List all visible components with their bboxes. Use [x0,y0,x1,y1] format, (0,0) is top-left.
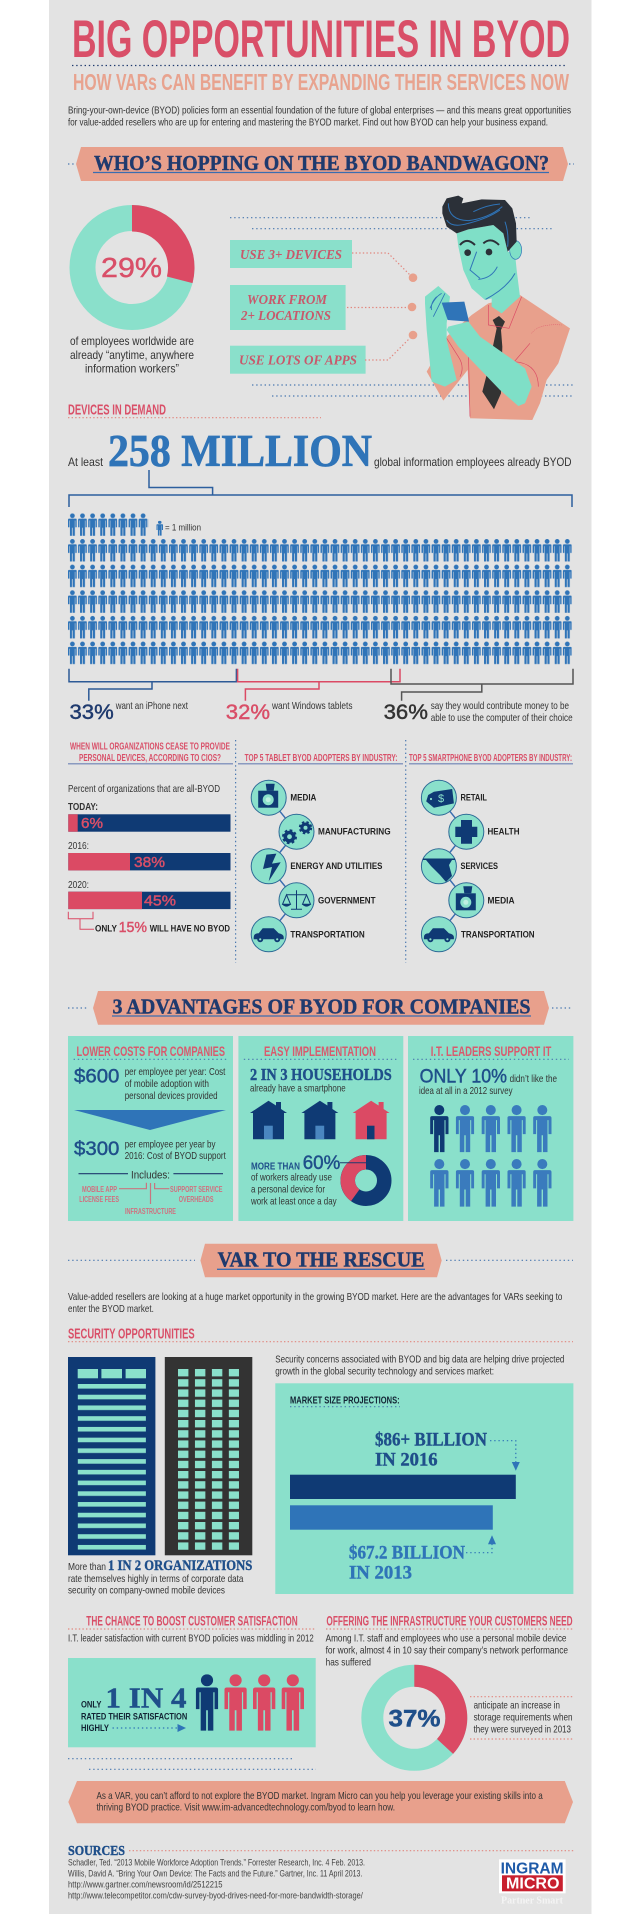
stat: 36% contribute money: 36% [384,701,428,724]
column: top 5 smartphone adopters [409,752,573,952]
icon: camera, media [251,780,317,815]
cost: $600: $600 [74,1067,119,1088]
logo: Ingram Micro Partner Smart [499,1859,566,1907]
bar: today 6%: 6% [81,816,103,832]
donut chart: 60% [340,1155,384,1201]
bar: 2016 38%: 38% [134,855,165,871]
arrow: to 2016 bar [490,1441,520,1471]
label: use 3+ devices [230,240,417,282]
cost: $300: 2016: Cost of BYOD support [125,1150,226,1162]
column heading: WHEN WILL ORGANIZATIONS CEASE TO PROVIDE [70,740,230,752]
icon: price tag, retail [421,780,487,815]
bracket: 33% [69,669,236,701]
icon: bolt, energy and utilities: ENERGY AND UTILITIES [290,861,382,872]
text: more than 60%: MORE THAN [251,1160,300,1172]
text: storage requirements [470,1697,573,1739]
icon: price tag, retail: RETAIL [460,793,487,804]
statistic: only 10%: idea at all in a 2012 survey [419,1085,513,1097]
donut caption: already “anytime, anywhere [70,348,194,362]
donut chart: 37% [372,1665,467,1760]
icon: network bridge, services: SERVICES [460,861,498,872]
heading: security opportunities: SECURITY OPPORTUNITIES [68,1327,195,1343]
text: more than 60% [250,1153,340,1208]
banner: VAR to the rescue: VAR TO THE RESCUE [218,1248,424,1272]
heading: devices in demand: DEVICES IN DEMAND [68,402,166,418]
includes list [78,1169,223,1216]
icon: car, transportation [251,917,365,952]
text: more than 60%: work at least once a day [250,1196,337,1208]
column: when will organizations cease [68,740,233,936]
text: network performance [326,1633,568,1669]
bar: 2020 45%: 2020: [68,880,89,891]
label: use lots of apps [230,331,417,374]
text: 1 in 2 organizations: More than [68,1561,106,1573]
cost: $300 [74,1138,226,1162]
icon: gears, manufacturing [279,814,391,849]
panel: market size projections [275,1383,573,1594]
callout: only 15% will have no BYOD: 15% [119,919,147,936]
text: storage requirements: storage requirements when [474,1712,573,1724]
icon: cross, health: HEALTH [488,827,520,838]
text: 1 in 2 organizations [68,1558,252,1597]
panel: 1 in 4 [68,1658,316,1747]
sources: Willis, David A. “Bring Your Own Device: The Facts and the Future.” Gartner, Inc. 11 April 2013. [68,1869,362,1880]
statistic text: 1 IN 4 [106,1682,186,1714]
bar: 2020 45% [68,880,230,910]
bar: 2016 38% [68,841,230,871]
panel heading: I.T. LEADERS SUPPORT IT [431,1043,552,1059]
cost: $600 [74,1066,225,1102]
panel heading: EASY IMPLEMENTATION [264,1043,376,1059]
text: 1 in 2 organizations: rate themselves highly in terms of corporate data [68,1573,244,1585]
icon: car, transportation: TRANSPORTATION [461,929,535,940]
intro text [68,104,571,128]
donut chart: 29% [82,205,195,317]
pictogram: 4 people [196,1674,304,1731]
column heading: PERSONAL DEVICES, ACCORDING TO CIOS? [79,752,221,764]
text: storage requirements: anticipate an increase in [474,1700,560,1712]
cost: $300: $300 [74,1139,119,1160]
donut caption: information workers” [85,362,179,376]
text: 1 in 2 organizations: security on company-owned mobile devices [68,1585,225,1597]
icon: car, transportation [421,917,535,952]
arrow: down triangle [74,1110,226,1130]
legend: one person equals 1 million [156,521,201,536]
banner: 3 advantages of BYOD: 3 ADVANTAGES OF BYOD FOR COMPANIES [112,994,530,1018]
text: more than 60%: of workers already use [251,1172,332,1184]
donut caption: of employees worldwide are [70,334,194,348]
stat: 33% want an iPhone: want an iPhone next [115,700,188,712]
icon: scales, government [279,883,376,918]
bar: 2016 38%: 2016: [68,841,89,852]
statistic: 2 in 3 households [250,1065,392,1094]
statistic: 2 in 3 households: already have a smartphone [250,1082,346,1094]
legend: one person equals 1 million: = 1 million [165,523,201,534]
includes list: OVERHEADS [179,1195,214,1204]
label: work from 2+ locations [230,285,416,330]
stat: 32% want Windows tablets [226,700,352,724]
donut chart: 29%: 29% [101,252,162,283]
column heading [68,740,233,764]
banner: 3 advantages of BYOD [68,991,573,1025]
sources [68,1844,574,1901]
stat: 36% contribute money: say they would contribute money to be [431,700,569,712]
cost: $600: per employee per year: Cost [125,1066,225,1078]
cost: $600: of mobile adoption with [125,1078,209,1090]
sources: http://www.gartner.com/newsroom/id/2512215 [68,1880,222,1891]
logo: Ingram Micro Partner Smart: INGRAM [501,1860,564,1877]
heading: customer satisfaction: THE CHANCE TO BOOST CUSTOMER SATISFACTION [86,1614,298,1629]
cost: $600: personal devices provided [125,1090,218,1102]
pictogram: 10 people [430,1105,552,1207]
icon: bolt, energy and utilities [251,849,382,884]
bar: 2020 45%: 45% [144,894,176,910]
text: 1 in 2 organizations: 1 IN 2 ORGANIZATIONS [108,1558,252,1574]
text: storage requirements: they were surveyed in 2013 [474,1724,571,1736]
paragraph: VAR opportunity: enter the BYOD market. [68,1303,154,1315]
stat: 36% contribute money: able to use the computer of their choice [431,712,573,724]
label: $67.2 billion: $67.2 BILLION [349,1542,465,1563]
sources: Schadler, Ted. “2013 Mobile Workforce Adoption Trends.” Forrester Research, Inc. 4 Feb. 2013. [68,1858,365,1869]
arrow: to 2013 bar [466,1535,496,1553]
callout: only 15% will have no BYOD [68,912,230,936]
statistic: 258 million: At least [68,455,104,469]
label: use lots of apps: USE LOTS OF APPS [239,354,357,369]
bracket: 32% [238,669,400,701]
bar: today 6%: TODAY: [68,802,98,813]
stat: 32% want Windows tablets: 32% [226,701,270,724]
stat: 32% want Windows tablets: want Windows tablets [271,700,352,712]
icon: three houses [250,1101,390,1139]
stat: 36% contribute money [384,700,573,724]
logo: Ingram Micro Partner Smart: Partner Smart [501,1896,564,1907]
icon: camera, media: MEDIA [290,793,317,804]
statistic: only 10% [419,1066,557,1097]
bracket above crowd [69,470,572,507]
arrow: dotted [112,1724,186,1732]
text: I.T. leader satisfaction: I.T. leader satisfaction with current BYOD policies was middling in 2012 [68,1633,314,1645]
icon: navy server block [68,1357,155,1555]
panel: easy implementation [238,1036,403,1221]
includes list: INFRASTRUCTURE [125,1207,176,1216]
stat: 33% want an iPhone [70,700,188,724]
includes list: Includes: [131,1169,170,1181]
chart subtitle: Percent of organizations that are all-BYOD [68,783,220,795]
statistic: 258 million: global information employees already BYOD [374,455,572,469]
banner: who's hopping on the BYOD bandwagon: WHO’S HOPPING ON THE BYOD BANDWAGON? [94,151,549,175]
text: more than 60%: 60% [303,1153,340,1174]
banner: call to action: thriving BYOD practice. Visit www.im-advancedtechnology.com/byod to learn how. [96,1802,395,1814]
label: $86+ billion: $86+ BILLION [375,1430,487,1450]
icon: network bridge, services [421,849,498,884]
text: network performance: for work, almost 4 in 10 say their company’s network performance [326,1645,568,1657]
statistic text: RATED THEIR SATISFACTION [81,1711,187,1722]
panel: I.T. leaders support it [408,1036,573,1221]
column: top 5 tablet adopters [238,752,403,952]
icon: dark server block [165,1357,252,1555]
text: network performance: has suffered [326,1657,371,1669]
donut caption [70,334,194,376]
column heading: TOP 5 TABLET BYOD ADOPTERS BY INDUSTRY: [245,752,398,764]
statistic text: HIGHLY [81,1723,110,1734]
statistic: 258 million: 258 MILLION [108,426,372,476]
statistic text [81,1682,187,1734]
icon: scales, government: GOVERNMENT [318,895,376,906]
illustration: man with phone [425,196,570,420]
sources: http://www.telecompetitor.com/cdw-survey-byod-drives-need-for-more-bandwidth-storage/ [68,1890,363,1901]
statistic: 2 in 3 households: 2 IN 3 HOUSEHOLDS [250,1065,392,1084]
logo: Ingram Micro Partner Smart: MICRO [506,1876,560,1893]
statistic text: ONLY [81,1699,102,1710]
icon: price tag, retail: $ [438,793,444,805]
callout: only 15% will have no BYOD: WILL HAVE NO BYOD [150,924,230,935]
icon: gears, manufacturing: MANUFACTURING [318,827,391,838]
bar: 2016 [290,1475,516,1499]
bracket: 36% [391,669,573,701]
pictogram: 258 people [68,513,573,667]
banner: who's hopping on the BYOD bandwagon [68,147,574,181]
text: more than 60%: a personal device for [251,1184,325,1196]
cost: $300: per employee per year by [125,1138,216,1150]
label: $67.2 billion: IN 2013 [349,1562,412,1583]
paragraph: VAR opportunity [68,1291,563,1315]
icon: cross, health [449,814,520,849]
text: network performance: Among I.T. staff and employees who use a personal mobile device [326,1633,567,1645]
text: security concerns [275,1354,565,1378]
icon: camera, media [449,883,515,918]
includes list: MOBILE APP [82,1185,117,1194]
sources: SOURCES [68,1844,125,1859]
includes list: SUPPORT SERVICE [170,1185,223,1194]
label: $86+ billion: IN 2016 [375,1450,438,1471]
label: $86+ billion [375,1430,487,1471]
icon: camera, media: MEDIA [488,895,515,906]
label: $67.2 billion [349,1542,465,1583]
statistic: only 10%: ONLY 10% [420,1066,507,1087]
text: security concerns: growth in the global security technology and services market: [275,1366,494,1378]
label: work from 2+ locations: 2+ LOCATIONS [240,309,331,324]
icon: car, transportation: TRANSPORTATION [290,929,365,940]
label: use 3+ devices: USE 3+ DEVICES [240,248,342,263]
banner: VAR to the rescue [68,1244,573,1277]
statistic: 258 million [68,426,572,476]
bar: 2013 [290,1505,493,1530]
stat: 33% want an iPhone: 33% [70,701,114,724]
panel heading: LOWER COSTS FOR COMPANIES [76,1043,225,1059]
panel heading: MARKET SIZE PROJECTIONS: [290,1396,400,1407]
donut chart: 37%: 37% [388,1706,440,1733]
bar: today 6% [68,802,230,832]
banner: call to action [68,1781,573,1823]
label: work from 2+ locations: WORK FROM [247,293,328,308]
statistic: only 10%: didn’t like the [510,1073,557,1085]
includes list: LICENSE FEES [79,1195,119,1204]
panel: lower costs for companies [68,1036,233,1221]
callout: only 15% will have no BYOD: ONLY [95,924,118,935]
